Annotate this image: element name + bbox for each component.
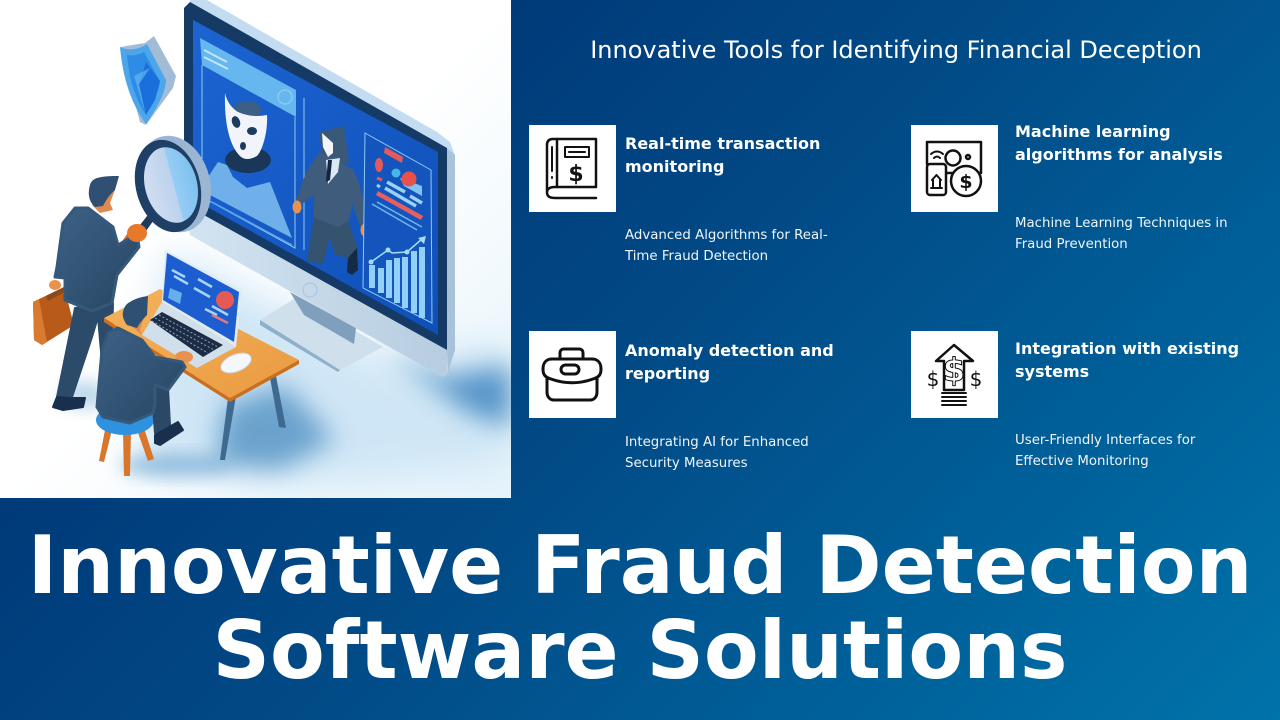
monitor stand — [260, 292, 383, 372]
icon: briefcase — [529, 331, 616, 418]
icon: finance book — [529, 125, 616, 212]
dashboard panel — [363, 133, 432, 323]
monitor screen — [193, 20, 438, 335]
heading: Integration with existing — [1015, 339, 1239, 358]
heading — [1015, 122, 1223, 164]
heading: reporting — [625, 364, 710, 383]
monitor — [184, 0, 455, 377]
heading — [625, 341, 834, 383]
main title: Software Solutions — [212, 604, 1068, 697]
hooded figure — [292, 127, 370, 275]
heading: Real-time transaction — [625, 134, 820, 153]
icon: dollar arrow — [911, 331, 998, 418]
main title: Innovative Fraud Detection — [28, 519, 1252, 612]
description: Fraud Prevention — [1015, 237, 1128, 252]
heading — [1015, 339, 1239, 381]
magnifying glass — [125, 127, 221, 241]
floor shadows — [61, 250, 511, 485]
heading — [625, 134, 820, 176]
shield — [120, 36, 176, 125]
description: Time Fraud Detection — [625, 249, 768, 264]
panel header — [200, 38, 296, 117]
icon: finance book: $ — [568, 162, 584, 187]
mask — [225, 93, 271, 173]
description — [624, 228, 828, 264]
panel: machine learning algorithms — [911, 122, 1228, 252]
heading: systems — [1015, 362, 1089, 381]
icon: money and phone — [911, 125, 998, 212]
seated man — [97, 296, 193, 445]
mountain graphic — [208, 162, 292, 238]
description: Machine Learning Techniques in — [1015, 216, 1228, 231]
heading: Machine learning — [1015, 122, 1171, 141]
description: User-Friendly Interfaces for — [1015, 433, 1195, 448]
icon: dollar arrow: $ — [927, 367, 939, 391]
laptop — [142, 250, 242, 368]
rising bar chart — [368, 236, 426, 318]
heading: algorithms for analysis — [1015, 145, 1223, 164]
desk — [104, 289, 299, 460]
main title — [28, 519, 1252, 697]
description — [1015, 433, 1196, 469]
description: Advanced Algorithms for Real- — [625, 228, 828, 243]
description: Security Measures — [625, 456, 748, 471]
panel: real-time transaction monitoring — [529, 125, 828, 264]
briefcase — [33, 287, 74, 345]
stool — [96, 405, 154, 476]
standing man — [33, 176, 147, 410]
subtitle: Innovative Tools for Identifying Financial Deception — [590, 36, 1202, 64]
heading: Anomaly detection and — [625, 341, 834, 360]
icon: dollar arrow: $ — [943, 351, 965, 389]
description: Integrating AI for Enhanced — [625, 435, 809, 450]
description: Effective Monitoring — [1015, 454, 1149, 469]
keyboard — [150, 312, 223, 357]
description — [625, 435, 809, 471]
icon: money and phone: $ — [959, 171, 973, 193]
panel: anomaly detection and reporting — [529, 331, 834, 471]
heading: monitoring — [625, 157, 724, 176]
panel: integration with existing systems — [911, 331, 1239, 469]
description — [1015, 216, 1228, 252]
icon: dollar arrow: $ — [970, 367, 982, 391]
illustration: fraud investigation scene — [0, 0, 511, 498]
computer mouse — [218, 349, 254, 377]
